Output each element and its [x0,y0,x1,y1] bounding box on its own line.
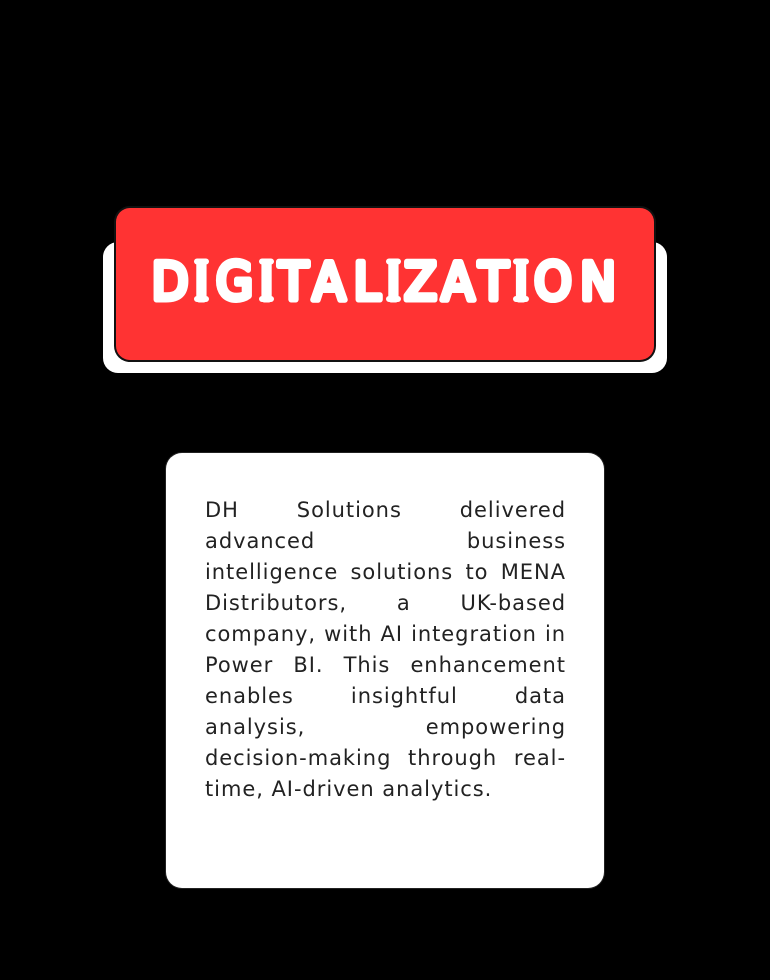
text block: description: time, AI-driven analytics. [205,777,492,801]
text block: description: enables insightful data [205,684,566,708]
text block: description: intelligence solutions to MENA [205,560,566,584]
text block: description: advanced business [205,529,566,553]
text block: description: decision-making through real- [205,746,566,770]
text block: description: Power BI. This enhancement [205,653,566,677]
text block: description: DH Solutions delivered [205,498,566,522]
text block: description [205,498,566,801]
panel: red title banner [116,208,654,360]
text block: description: Distributors, a UK-based [205,591,566,615]
text block: description: company, with AI integration in [205,622,566,646]
panel: white backing plate [103,242,667,373]
text block: description: analysis, empowering [205,715,566,739]
panel: description card [166,453,604,888]
title: DIGITALIZATION [152,251,616,312]
